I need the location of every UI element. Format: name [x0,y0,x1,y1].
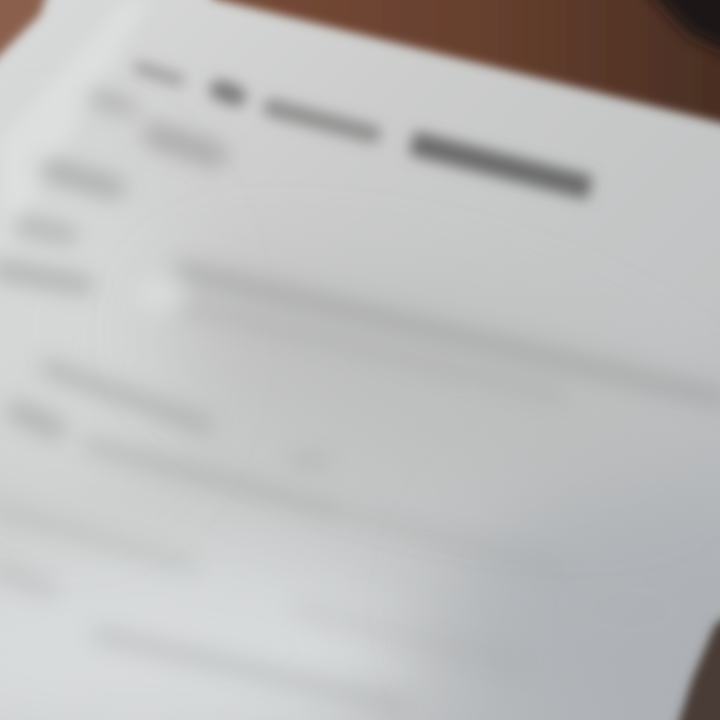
blurred document title [140,68,590,188]
title smudge, dark word [412,143,590,188]
dark object, bottom right corner [670,600,720,720]
light highlight in the middle of the page [135,277,185,313]
blurred subtitle and left labels [0,98,215,285]
wooden table, top right [205,0,720,130]
wooden table, top left corner [0,0,55,85]
blurred body text lines [0,272,720,705]
title smudge, light words [140,68,372,134]
dark shadow, top right corner [630,0,720,62]
light page edge strip, left [0,0,150,260]
